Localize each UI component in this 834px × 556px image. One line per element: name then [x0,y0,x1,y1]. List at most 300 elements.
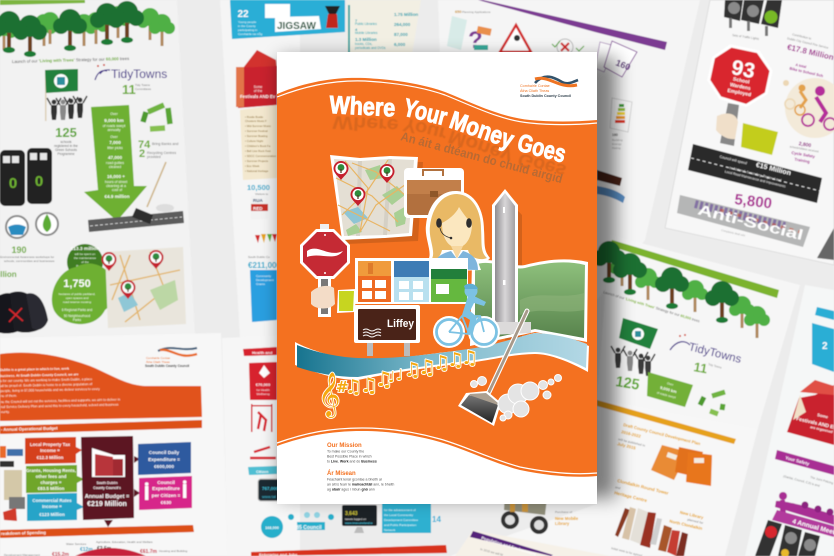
your safety heading [775,450,834,488]
stat: bring banks: 2 [139,148,145,160]
poster drop shadow [280,58,616,498]
green arrow: street cleaning: litter picks [107,146,123,150]
citizen engagement panel [248,466,288,501]
visitors stat and RUA RED: RED [253,206,263,211]
council logo: South Dublin County Council [520,94,571,98]
festival tent: Some [817,412,829,420]
music notes: ♩ [396,366,403,384]
green arrow: street cleaning [84,105,147,221]
music notes: ♫ [433,352,450,374]
anti-social graffiti panel [677,195,810,247]
intro copy [0,365,121,414]
festival list: • Children's Book Fa [245,144,271,148]
web stat monitor: tweets logged on [345,517,367,521]
library stats page: 4 [355,27,358,32]
box: annual budget [81,436,140,527]
stat: 5,800: 5,800 [734,191,773,213]
tidytowns logo [670,334,743,366]
festival list: • Bell Live Rock Fest [245,149,271,153]
logo [145,348,197,368]
planning cards: 160 [595,41,637,77]
title [329,91,569,168]
green circle: 1,750 hectares: 50 Neighbourhood [64,314,90,318]
intro copy: ounty. [1,410,10,414]
stat: safety spend 17.8 million: A total [795,63,807,69]
box: expenditure per citizen: Council [157,480,175,486]
heading text: round tower: Clondalkin Round Tower [617,478,669,496]
visitors stat and RUA RED [247,183,270,219]
spending legend: €12m [80,547,93,553]
anti-social graffiti panel: Anti-Social [696,202,805,244]
river band [295,333,589,380]
title reflection: Your [401,114,449,145]
green arrow: street cleaning: 7,000 [109,140,121,145]
title reflection: Money [445,126,515,168]
tidytowns logo: TidyTowns [687,341,743,366]
new mobile library [501,490,579,534]
music notes: 𝄞 [318,372,340,418]
library stats page: Public Libraries [355,22,377,26]
heading text: new library: North Clondalkin [669,519,703,531]
energy rating chart [610,98,632,150]
anti-social graffiti panel: Complaints dealt with [721,228,746,238]
title reflection: Where [332,112,399,136]
green street cleaning panel: of roads swept [656,391,676,400]
stat: bring banks: 74 [138,139,151,151]
grants panel: South Dublin Co [248,255,270,259]
stat: bring banks: Recycling Centres [147,151,176,155]
call centre circle: 168,000 [265,526,279,530]
budget heading bar: - Annual Operational Budget [1,426,58,432]
broom [458,311,527,426]
green arrow: street cleaning: €4.9 million [104,194,130,199]
stat: 125 schools [54,125,78,156]
citizen engagement panel: www.tal [262,494,276,499]
planning icons [447,16,492,54]
top wave highlight [277,81,597,124]
tidytowns logo [95,64,167,81]
music notes: ♫ [447,349,464,371]
green circle: public realm spend: the maintenance [74,256,96,260]
hand holding sign [311,279,356,317]
intro copy: nal Service Delivery Plan and send this to every household, school and business [1,403,119,409]
energy rating chart: Building [612,138,623,142]
stat: 11 committees: Committees [135,87,152,91]
box: commercial rates: €123 Million [39,512,65,517]
library stats page: 264,000 [394,22,411,27]
spending legend: Housing and Building [159,549,188,553]
visitors stat and RUA RED: 10,500 [247,183,270,192]
mission statement [327,443,377,464]
intro copy: people, living in 97,000 households and we deliver services to every [0,387,100,393]
litter bins [0,148,52,206]
spending donut [75,548,146,556]
energy rating chart: 160 [612,133,618,137]
planning icons: ? [468,27,483,54]
heading text: development plan: 2016-2022 [621,429,642,439]
bunting [255,234,277,243]
title: Goes [514,129,569,168]
music notes: ♫ [360,373,378,397]
heading text: new library: New Library [679,510,705,520]
stat: 190 workshops [0,245,55,263]
box: grants: other fees and [36,474,67,479]
stat: 11: 11 [692,359,709,376]
heading text: development plan: will be published in [617,437,646,448]
woman with headset [426,191,490,272]
community network panel: Network [384,528,396,532]
grants panel: Community [256,274,272,278]
community panel: Comhairle na nÓg [238,31,263,36]
green house [431,269,467,302]
stat: safety spend 17.8 million: €17.8 Million [786,43,834,62]
page: annual budget, bottom left [0,333,228,556]
green circle: public realm spend: Public Realm [76,264,94,268]
box: grants: €83.5 Million [38,486,65,491]
stat: safety spend 17.8 million [780,31,834,80]
planning page: 650 [455,10,461,14]
stop sign: 93 school wardens: 93 [730,56,757,83]
music notes: ♫ [461,347,478,369]
stat: 11 committees: 11 [122,82,136,97]
new mobile library: New Mobile [555,516,579,521]
sign and arc fragment [597,170,625,203]
intro copy: ne of them. [1,394,17,398]
stat: 11 committees: Tidy Towns [135,83,150,87]
map with pins [102,247,186,328]
stat: 190 workshops: Environmental Awareness workshops for [0,255,54,259]
stat: 11 committees [122,82,152,97]
community network panel [382,500,431,533]
visitors stat and RUA RED: RUA [253,198,263,203]
page: development plan, orange band [450,398,758,556]
library stats page: 7 [355,18,358,23]
community panel: 22 [237,9,249,20]
green circle: 1,750 hectares: Parks [73,318,81,322]
mission statement in Irish: Ár Misean [327,470,356,477]
stat: 125 schools: schools [60,140,72,144]
festival list: • Rustle Bustle [245,115,264,119]
health heading and panel: for Health [256,388,270,392]
stat: bring banks: Bring Banks and [152,142,178,146]
music notes: ♫ [345,376,362,398]
budget heading bar [0,420,202,434]
heading text: development plan: July 2015 [617,441,637,451]
book row [615,507,688,556]
green circle: public realm spend: of the [81,260,89,264]
festival tent [236,50,277,180]
box: commercial rates: Income = [42,504,62,509]
stat: 11 [692,359,723,376]
box: daily expenditure: €600,000 [154,464,174,470]
music notes: ♫ [375,367,393,391]
community network panel: and Public Participation [384,523,417,527]
health heading and panel: Wellbeing [256,392,270,396]
library stats page: Mobile Libraries [355,31,378,35]
stat: 190 workshops: 190 [11,245,27,255]
festival tent: Some [254,85,263,89]
festival list: • Summer Festival [245,129,268,133]
title: Your [401,94,450,132]
tree caption: Launch of our 'Living with Trees' Strategy for our 60,000 trees [12,56,129,64]
title: Where [329,91,396,122]
litter bins: 0 [9,175,17,192]
tree row [0,1,175,57]
dust clouds [470,374,562,421]
community panel [230,0,345,39]
stat: bring banks [138,139,178,160]
tree caption: Launch of our 'Living with Trees' Strategy for our 60,000 trees [603,290,700,323]
mission statement in Irish [327,470,394,492]
green arrow: street cleaning: cleaning at a [106,184,126,188]
new mobile library: Library [555,521,570,526]
cyan community panel [812,307,834,372]
mission statement in Irish: Féachaint lenár gcontae a bheith ar [327,478,383,482]
box: annual budget: County Council's [93,486,121,490]
health heading and panel [243,347,277,458]
cyan community panel: 2 [822,341,828,352]
logo: Comhairle Contae [146,356,171,360]
library stats page: periodicals and DVDs [355,46,386,50]
green circle: 1,750 hectares: road reserve mowing [63,300,91,304]
web stat monitor: www.tmasuireland.ie [344,521,373,525]
heading text: round tower: and [615,485,621,490]
library stats page: books, CDs, [355,42,372,46]
mission statement: to Live, Work and do Business [327,460,377,464]
your safety heading: The Joint Policing [810,475,834,485]
mission statement: Our Mission [327,443,362,449]
green arrow: street cleaning: annually [107,128,121,132]
title reflection: Goes [516,149,568,182]
green circle: public realm spend: will be spent on [75,252,96,256]
box: grants: charges = [40,480,62,485]
stat: 14: 14 [432,515,441,524]
your safety heading: (Gardai, Council, CJI) is and [783,474,820,488]
festival list: • Summer Boating [245,134,268,138]
call centre circle [261,516,283,538]
green arrow: street cleaning: Over [110,135,119,139]
recycling symbol [700,392,725,414]
annual meetings table [772,492,834,537]
stat: 125 schools: Green Schools [55,148,77,152]
bike to school illustration [783,78,834,138]
box: expenditure per citizen [139,476,192,510]
festival list: • Culture Night [245,139,263,143]
orange wave background [277,78,597,477]
web stat monitor: 3,643 [345,511,358,517]
spending heading bar: reakdown of Spending [1,530,46,536]
box: daily expenditure [138,442,191,475]
grants panel [248,255,281,322]
box: daily expenditure: Council Daily [149,450,180,456]
mission statement: Best Possible Place in which [327,454,372,458]
music notes: # [336,378,349,396]
library stats page: 6,000 [394,42,406,47]
green arrow: street cleaning: 9,000 km [104,118,124,123]
energy rating chart: Rating [612,146,621,150]
traffic lights [724,0,782,41]
box: daily expenditure: Expenditure = [148,457,180,463]
box: annual budget: Annual Budget = [85,494,130,500]
citizen engagement panel: Citizen [256,470,269,474]
green schools flag [45,69,78,121]
council logo: Comhairle Contae [520,84,550,88]
box: expenditure per citizen: €630 [161,500,172,506]
logo: Átha Cliath Theas [146,360,170,364]
liffey sign [354,305,420,356]
orange wave header [0,353,202,421]
spending heading bar [0,525,194,538]
stat: 125 schools: 125 [55,125,77,140]
spending legend: €2.5m [97,546,112,552]
stat: safety spend 17.8 million: Dublin City Council Fire Service [787,36,829,50]
meetings icon [288,512,334,531]
planning page [438,0,700,300]
green street cleaning panel: 9,000 km [660,385,678,394]
warning triangle [500,25,531,52]
community network panel: for the advancement of [384,508,416,512]
plan books [651,445,712,486]
green arrow: street cleaning: of roads swept [103,124,125,128]
box: property tax: Income = [40,448,60,453]
stat: 125 schools: Programme [57,152,75,156]
stat: 11: Tidy Towns [708,362,723,370]
heading text: new library [669,510,705,531]
music notes: ♩ [388,368,395,386]
box: expenditure per citizen: Expenditure [152,486,180,492]
road: €15 million: €15 Million [755,162,792,177]
traffic lights [755,520,820,556]
green circle: 1,750 hectares: 6 Regional Parks and [62,308,92,312]
map pins [334,161,394,206]
box: annual budget: €219 Million [87,501,127,508]
festival list: • Mid-Summer Music [245,124,271,128]
refuse bags with cross [0,291,48,333]
green arrow: street cleaning: cost of [112,188,122,192]
briefcase [404,168,464,218]
festival list: • SDCC Commemoration [245,154,277,158]
green arrow: street cleaning: cleaned [109,165,121,169]
spending legend: €61.7m [140,549,158,555]
festival tent: are organised [810,425,833,434]
mission statement in Irish: ag obair agus i mbun gnó ann [327,488,375,492]
box: property tax: €12.3 Million [37,455,64,460]
heading text: round tower: Heritage Centre [614,490,648,503]
council logo: Átha Cliath Theas [520,89,549,93]
festival list: Chosters Music F [245,119,267,123]
grey page corner [817,228,834,260]
intro copy: ne the Council will set out the services, facilities and supports, we aim to deliver in [1,397,120,404]
poster: where your money goes cover [277,52,597,504]
stat: safety spend 17.8 million: Contribution to [792,32,812,41]
green street cleaning panel: Over [667,381,674,387]
music notes: ♫ [418,355,436,379]
stop sign with waves [300,224,350,279]
new mobile library: Purchase of [555,510,572,514]
library stats page: 1.3 Million [355,37,377,42]
warden's hand and sleeve [716,103,778,155]
stop sign: 93 school wardens: School [732,76,751,86]
cycle safety training stat: 2,800 [798,141,812,149]
subtitle in Irish: An áit a dtéann do chuid airgid [399,129,564,186]
box: property tax [25,437,82,464]
festival list: • Summer Projects [245,159,269,163]
green arrow: street cleaning: 47,000 [108,155,122,160]
web stat monitor [342,505,377,533]
festival tent [787,380,834,445]
cross and tick icons [552,39,584,55]
community panel: Young people [238,20,257,24]
spending legend [4,540,188,556]
page: green tidy towns, right [592,235,800,428]
stat: 125 schools: 125 [614,373,641,394]
traffic lights: Sets of Traffic Lights [732,33,760,41]
people icons [611,346,655,376]
flag [619,318,658,349]
festival tent: Festivals AND Ev [240,94,276,99]
intro copy: s for our county. We are working to make South Dublin, a place [0,377,92,383]
library stats page [347,0,421,55]
spending legend: Agriculture, Education, Health and Welfare [96,540,153,544]
box: annual budget: South Dublin [96,481,118,485]
health heading and panel: €70,000 [256,382,271,387]
meetings icon: 85 Council [296,525,322,531]
school children [47,96,87,120]
intro copy: business. At South Dublin County Council, we are [0,372,79,378]
community panel: participating in [238,28,258,32]
community panel: in the County [238,24,256,28]
stat: 125 schools: registered in the [54,144,78,148]
community panel: JIGSAW [277,21,316,32]
library stats page: 1.75 Million [394,12,419,17]
box: commercial rates: Commercial Rates [32,498,72,503]
green circle: 1,750 hectares: 1,750 [63,278,91,290]
box: property tax: Local Property Tax [30,442,71,447]
energy rating chart: Energy [612,142,622,146]
cycle safety training stat: Cycle Safety [791,150,816,159]
box: grants [26,465,84,493]
stat: bring banks: provided [147,155,161,159]
town illustration [0,446,25,521]
green circle: 1,750 hectares: hectares of public parkland, [59,292,96,296]
intro copy: Dublin is a great place in which to live, work [0,367,69,372]
green arrow: street cleaning: 16,000 + [107,174,125,179]
your safety heading: Your Safety [785,455,810,466]
festival list [245,115,277,173]
library stats page: 87,000 [394,32,408,37]
blue house [394,261,429,302]
stop sign: 93 school wardens: Wardens [729,82,751,92]
recycling symbol [143,105,170,129]
planning cards: 160: 160 [614,58,632,72]
visitors stat and RUA RED: Visitors to [255,192,268,196]
cyclist [433,284,500,348]
water and energy icons [6,213,58,238]
green arrow: street cleaning: road gullies [106,161,124,165]
page: population, purple band: Population and Environment [481,535,537,556]
page: your safety and festivals, far right [745,285,834,556]
green circle: 1,750 hectares [52,264,115,324]
column two pages [220,0,447,556]
logo: South Dublin County Council [145,364,189,368]
orange house [358,261,391,302]
planning page: Planning Applications [462,10,491,14]
title reflection [332,112,568,182]
box: commercial rates [27,493,84,521]
page: road safety, top right [665,0,834,265]
citizen engagement panel: 767,000 [262,486,279,491]
stop sign: 93 school wardens: Employed [727,88,751,98]
